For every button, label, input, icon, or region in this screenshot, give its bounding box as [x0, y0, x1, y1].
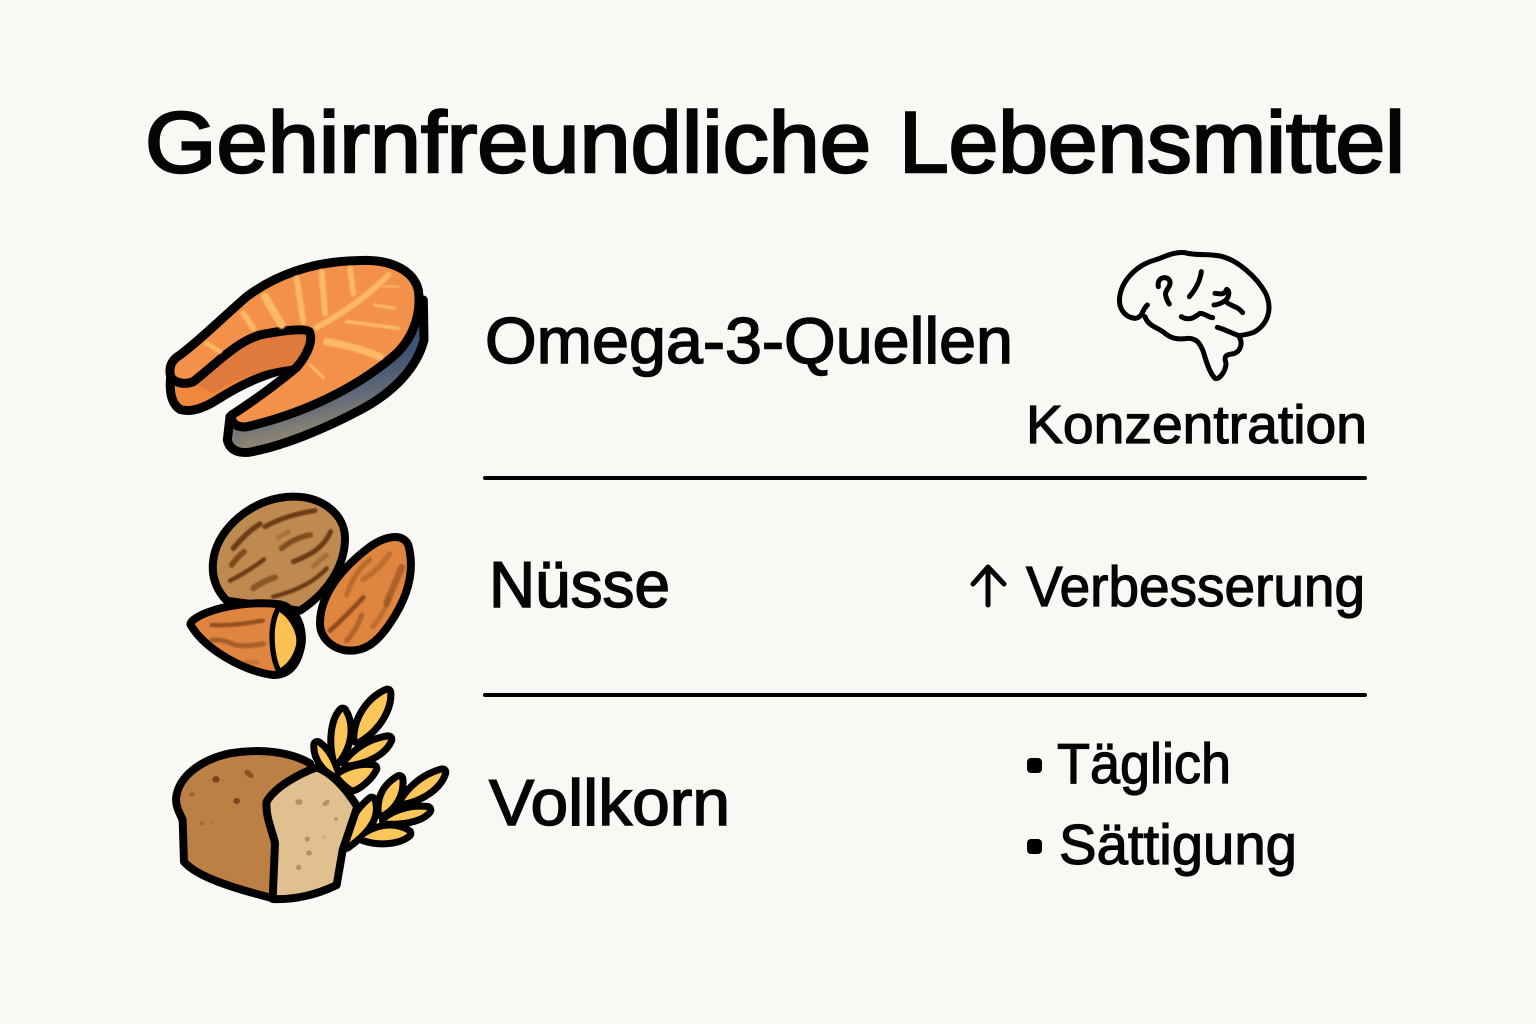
- almond left: [191, 603, 302, 675]
- bullet: Sättigung: Sättigung: [1059, 813, 1297, 877]
- title: Gehirnfreundliche: [145, 95, 871, 191]
- wheat outline: [317, 693, 442, 845]
- label: Vollkorn: Vollkorn: [489, 766, 730, 839]
- label: Konzentration: Konzentration: [1026, 395, 1367, 455]
- icon: bread and wheat: [176, 693, 442, 899]
- label: Verbesserung: Verbesserung: [1026, 555, 1365, 619]
- title: [145, 95, 1405, 191]
- loaf crust: [176, 751, 320, 898]
- divider: [483, 476, 1367, 480]
- loaf cut face: [266, 767, 357, 899]
- icon: brain: [1119, 253, 1269, 379]
- bullet: Täglich: Täglich: [1057, 732, 1231, 796]
- walnut: [213, 497, 345, 611]
- label: Nüsse: Nüsse: [489, 548, 670, 621]
- icon: up arrow: [973, 567, 1004, 605]
- label: Omega-3-Quellen: Omega-3-Quellen: [485, 304, 1013, 377]
- almond right: [320, 537, 411, 651]
- icon: nuts: [191, 497, 411, 675]
- wheat kernels: [317, 693, 442, 845]
- icon: salmon steak: [170, 260, 424, 452]
- title: Lebensmittel: [899, 95, 1405, 191]
- divider: [483, 693, 1367, 697]
